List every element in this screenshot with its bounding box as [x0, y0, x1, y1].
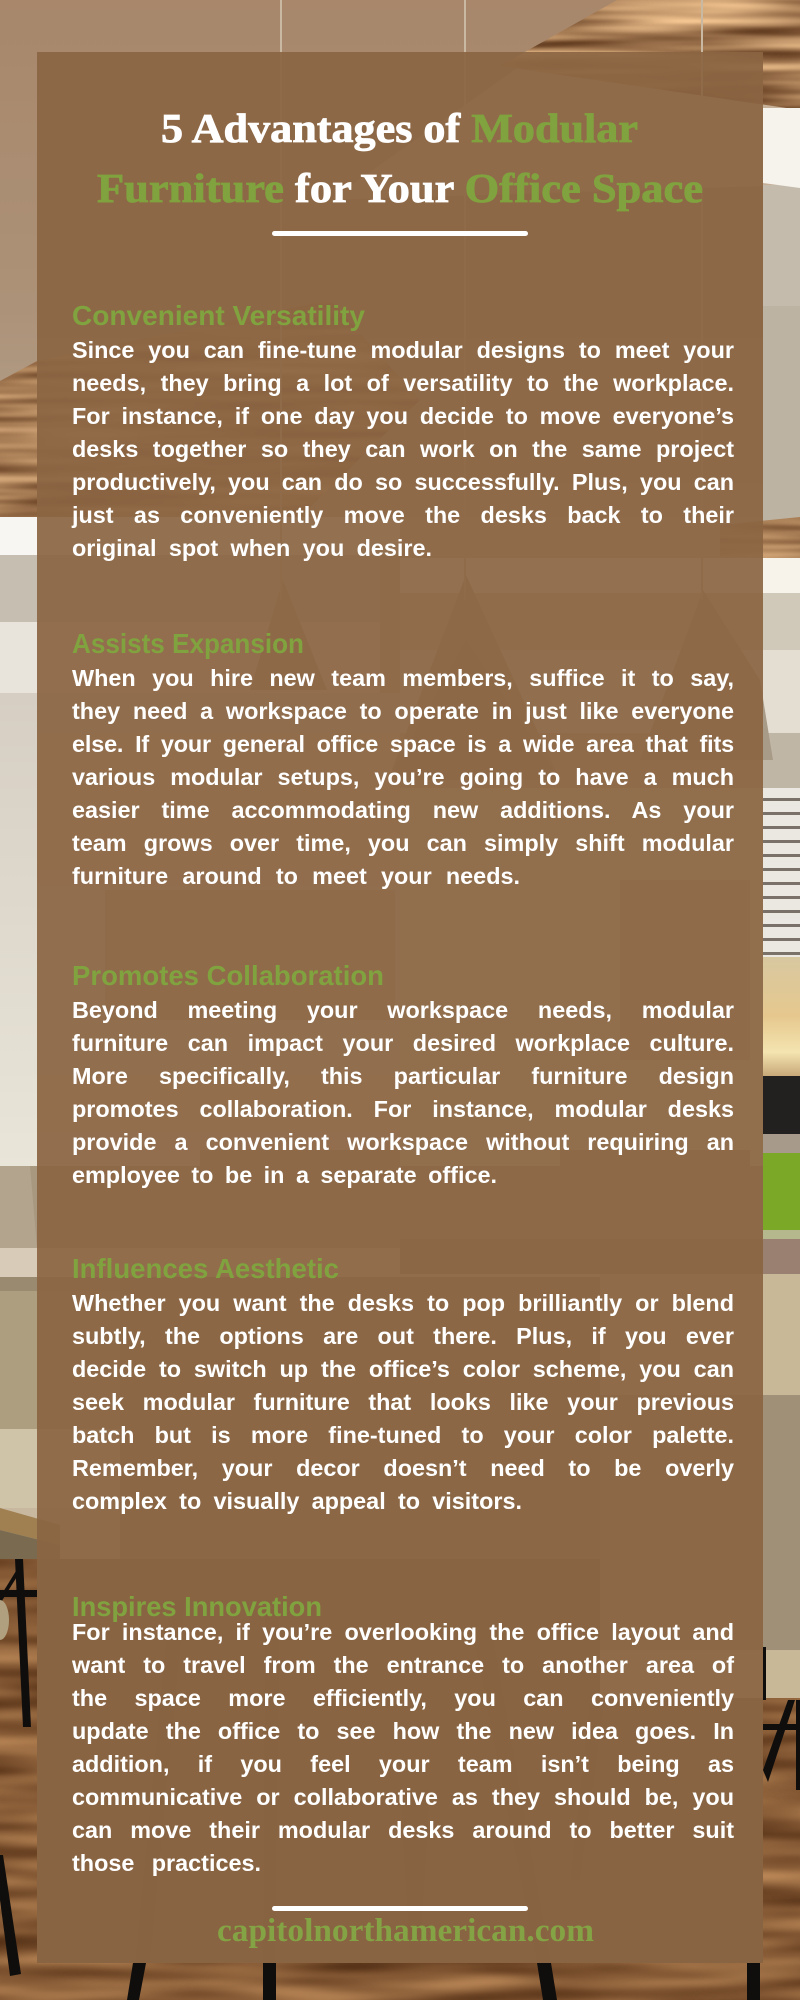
body text: Assists Expansion: team grows over time, you can simply shift modular	[72, 830, 734, 856]
section: Inspires Innovation	[72, 1591, 734, 1876]
wall and stripes	[0, 517, 400, 555]
right window: blinds, sky, green panel	[763, 788, 800, 957]
wooden floor	[0, 1559, 800, 2000]
body text: Inspires Innovation: those practices.	[72, 1850, 261, 1876]
body text: Inspires Innovation: can move their modular desks around to better suit	[72, 1816, 734, 1842]
heading: Assists Expansion: Assists Expansion	[72, 628, 304, 659]
body text: Convenient Versatility: needs, they bring a lot of versatility to the workplace.	[72, 370, 734, 396]
body text: Assists Expansion: they need a workspace to operate in just like everyone	[72, 698, 734, 724]
body text: Assists Expansion: else. If your general office space is a wide area that fits	[72, 730, 734, 756]
body text: Promotes Collaboration: promotes collaboration. For instance, modular desks	[72, 1096, 734, 1122]
body text: Inspires Innovation: update the office to see how the new idea goes. In	[72, 1718, 734, 1744]
body text: Inspires Innovation: the space more efficiently, you can conveniently	[72, 1684, 734, 1710]
body text: Assists Expansion: furniture around to meet your needs.	[72, 862, 520, 888]
body text: Influences Aesthetic: subtly, the options are out there. Plus, if you ever	[72, 1322, 734, 1348]
body text: Influences Aesthetic	[72, 1290, 734, 1514]
title divider	[272, 231, 528, 236]
body text: Assists Expansion: various modular setups, you’re going to have a much	[72, 764, 734, 790]
body text: Convenient Versatility: original spot when you desire.	[72, 535, 432, 561]
body text: Inspires Innovation: want to travel from the entrance to another area of	[72, 1652, 734, 1678]
body text: Promotes Collaboration: More specifically, this particular furniture design	[72, 1062, 734, 1088]
desks and lower room	[0, 1166, 763, 1248]
body text: Promotes Collaboration: Beyond meeting your workspace needs, modular	[72, 996, 734, 1022]
body text: Convenient Versatility	[72, 337, 734, 561]
body text: Inspires Innovation: communicative or collaborative as they should be, you	[72, 1784, 734, 1810]
body text: Promotes Collaboration: employee to be in a separate office.	[72, 1162, 497, 1188]
body text: Inspires Innovation	[72, 1618, 734, 1876]
body text: Influences Aesthetic: complex to visually appeal to visitors.	[72, 1488, 522, 1514]
body text: Convenient Versatility: desks together so they can work on the same project	[72, 436, 734, 462]
pendant wires	[281, 0, 702, 600]
pendant lamps	[250, 575, 773, 780]
title: Furniture for Your Office Space	[97, 165, 703, 211]
body text: Convenient Versatility: For instance, if one day you decide to move everyone’s	[72, 403, 734, 429]
heading: Inspires Innovation: Inspires Innovation	[72, 1591, 322, 1622]
body text: Inspires Innovation: addition, if you feel your team isn’t being as	[72, 1750, 734, 1776]
body text: Assists Expansion: When you hire new team members, suffice it to say,	[72, 664, 734, 690]
faint blinds and desks behind panel	[105, 880, 750, 1060]
body text: Influences Aesthetic: Remember, your decor doesn’t need to be overly	[72, 1454, 734, 1480]
body text: Promotes Collaboration: provide a convenient workspace without requiring an	[72, 1128, 734, 1154]
body text: Promotes Collaboration	[72, 996, 734, 1188]
faint chairs behind panel	[135, 1600, 605, 1963]
footer divider	[272, 1906, 528, 1911]
heading: Promotes Collaboration: Promotes Collaboration	[72, 960, 384, 991]
body text: Convenient Versatility: productively, you can do so successfully. Plus, you can	[72, 469, 734, 495]
heading: Influences Aesthetic: Influences Aesthetic	[72, 1253, 339, 1284]
body text: Assists Expansion: easier time accommodating new additions. As your	[72, 796, 734, 822]
body text: Influences Aesthetic: decide to switch up the office’s color scheme, you can	[72, 1356, 734, 1382]
body text: Assists Expansion	[72, 664, 734, 889]
ceiling	[0, 0, 800, 560]
section: Convenient Versatility	[72, 300, 734, 561]
section: Promotes Collaboration	[72, 960, 734, 1188]
body text: Convenient Versatility: Since you can fine-tune modular designs to meet your	[72, 337, 734, 363]
body text: Convenient Versatility: just as conveniently move the desks back to their	[72, 502, 734, 528]
body text: Inspires Innovation: For instance, if you’re overlooking the office layout and	[72, 1618, 734, 1644]
chair legs	[0, 1559, 800, 2000]
footer website: capitolnorthamerican.com	[217, 1913, 594, 1949]
body text: Influences Aesthetic: seek modular furniture that looks like your previous	[72, 1388, 734, 1414]
beige chair knob	[0, 1600, 9, 1640]
body text: Influences Aesthetic: Whether you want the desks to pop brilliantly or blend	[72, 1290, 734, 1316]
body text: Influences Aesthetic: batch but is more fine-tuned to your color palette.	[72, 1422, 734, 1448]
title	[97, 105, 703, 212]
body text: Promotes Collaboration: furniture can impact your desired workplace culture.	[72, 1030, 734, 1056]
section: Assists Expansion	[72, 628, 734, 889]
title: 5 Advantages of Modular	[161, 105, 638, 151]
section: Influences Aesthetic	[72, 1253, 734, 1514]
heading: Convenient Versatility: Convenient Versatility	[72, 300, 365, 331]
